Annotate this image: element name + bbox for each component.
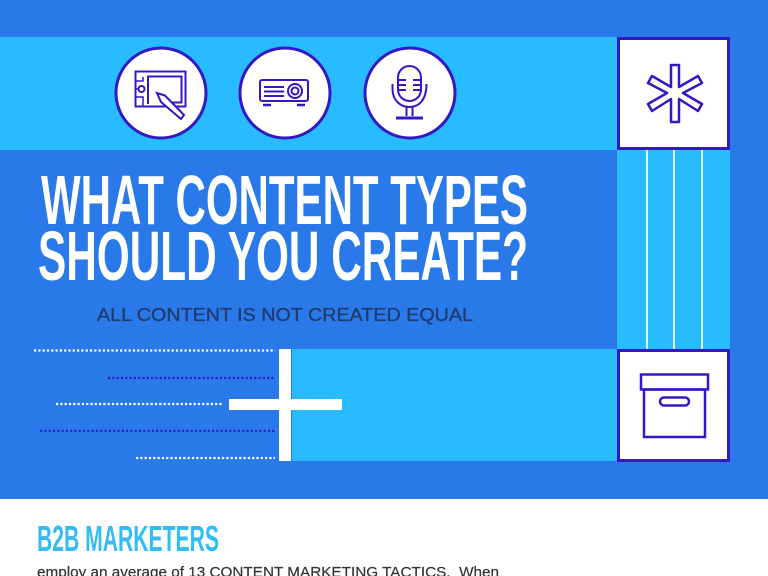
icon: microphone [365, 48, 455, 138]
panel: white intro section [0, 499, 768, 576]
icon: drawing tablet [116, 48, 206, 138]
heading: B2B marketers: B2B MARKETERS [37, 518, 219, 559]
icon: archive box tile [618, 350, 728, 460]
panel: right striped column [617, 150, 730, 350]
title [38, 161, 528, 295]
panel: icon band [0, 37, 618, 150]
icon: projector [240, 48, 330, 138]
icon: asterisk tile [618, 38, 728, 148]
subtitle: ALL CONTENT IS NOT CREATED EQUAL [97, 305, 473, 325]
panel: plus and dotted lines [34, 349, 617, 461]
